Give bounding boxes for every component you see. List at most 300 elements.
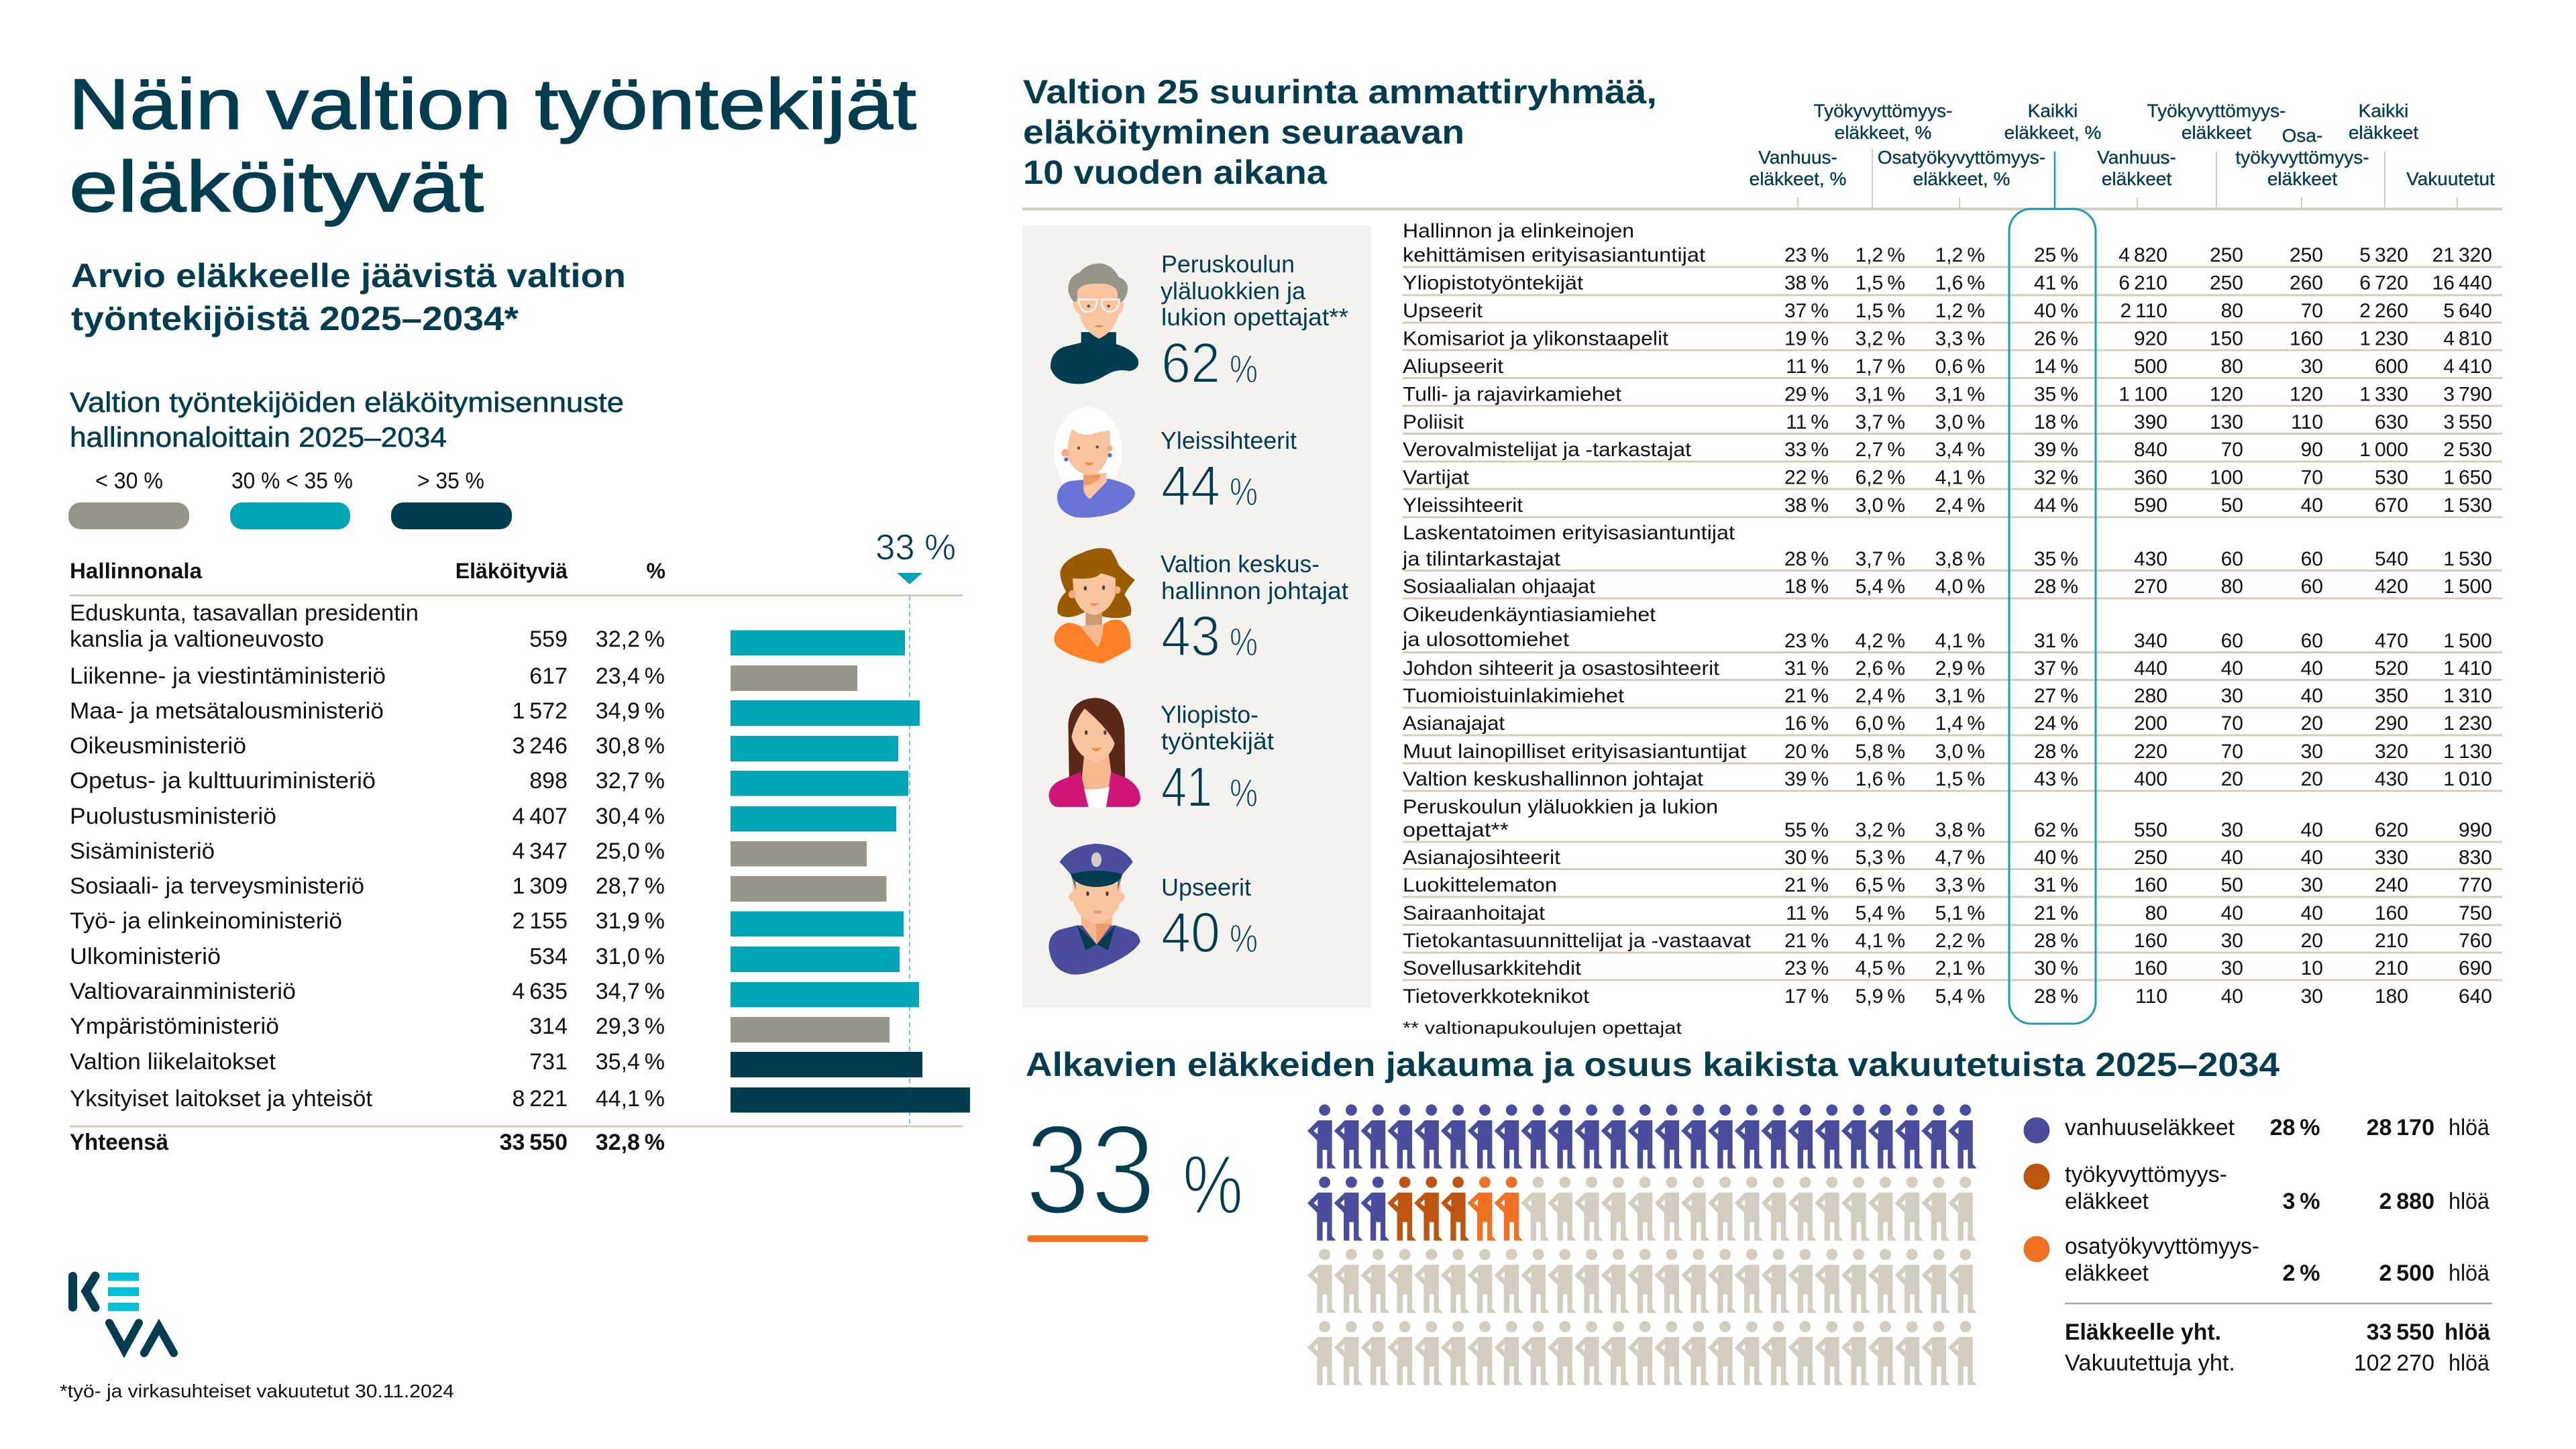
row 20: Asianajosihteerit — [1403, 847, 1561, 869]
row: Työ: Työ- ja elinkeinoministeriö — [70, 908, 342, 934]
text: teachers 62 % — [1161, 250, 1348, 394]
row 9: 4,1 % — [1935, 467, 1985, 488]
text: teachers 62 %: lukion opettajat** — [1161, 303, 1348, 331]
subtitle: työntekijöistä 2025–2034* — [71, 300, 519, 337]
row 6: Tulli- ja rajavirkamiehet — [1403, 384, 1622, 405]
row 16: 1 230 — [2443, 712, 2492, 735]
row 8: 2,7 % — [1856, 439, 1905, 461]
legend: colour classes: < 30 % — [95, 468, 163, 494]
row 19: 3,8 % — [1935, 819, 1985, 841]
average marker 33 % — [875, 527, 956, 584]
row 23: 760 — [2459, 930, 2492, 952]
row 23: 210 — [2375, 930, 2408, 952]
row 16: 200 — [2134, 712, 2167, 735]
row 16 — [1403, 712, 2492, 735]
row 1: 250 — [2210, 244, 2243, 266]
row 7: 3 550 — [2443, 411, 2492, 433]
row 18: 20 — [2221, 768, 2243, 790]
row 5: 600 — [2375, 356, 2408, 378]
row: Liikenne — [70, 663, 857, 691]
row 3 — [1403, 300, 2492, 322]
heading: 25 largest occupational groups: eläköityminen seuraavan — [1023, 113, 1464, 151]
column headers: työkyvyttömyys- — [2235, 147, 2369, 168]
row 24: 210 — [2375, 957, 2408, 979]
subtitle — [71, 257, 626, 337]
row 2: 6 720 — [2359, 272, 2408, 294]
row: Valtion liikelaitokset: 731 — [529, 1049, 568, 1075]
row 10: 50 — [2221, 494, 2243, 517]
row 8 — [1403, 439, 2492, 461]
row 8: 1 000 — [2359, 439, 2408, 461]
icon: central government manager — [1054, 548, 1135, 663]
column headers: eläkkeet, % — [2004, 122, 2101, 143]
row 16: 70 — [2221, 712, 2243, 735]
row 3: 37 % — [1784, 300, 1829, 322]
row: Valtiovarain — [70, 979, 919, 1008]
row 15: 30 — [2221, 685, 2243, 707]
row: Eduskunta: 32,2 % — [596, 627, 665, 652]
row 21: 240 — [2375, 874, 2408, 896]
row 19: 3,2 % — [1856, 819, 1905, 841]
row 21 — [1403, 874, 2492, 896]
row 19: 30 — [2221, 819, 2243, 841]
row 11 — [1402, 522, 2492, 570]
row 4: 920 — [2134, 327, 2167, 350]
row: Yksityiset: Yksityiset laitokset ja yhteisöt — [70, 1086, 373, 1112]
row: Sosiaali: 28,7 % — [596, 873, 665, 899]
row 23: Tietokantasuunnittelijat ja -vastaavat — [1403, 930, 1752, 952]
row: Puolustus: Puolustusministeriö — [70, 804, 276, 829]
disability pensions: hlöä — [2449, 1189, 2489, 1214]
row 24: 30 — [2221, 957, 2243, 979]
row: Opetus: Opetus- ja kulttuuriministeriö — [70, 768, 376, 794]
row 4 — [1403, 327, 2492, 350]
row: Opetus — [70, 768, 908, 796]
row 2: mixed pensions — [1307, 1177, 1977, 1240]
row 5: 14 % — [2034, 356, 2078, 378]
row: Yksityiset — [70, 1086, 970, 1112]
legend: colour classes — [68, 468, 512, 529]
row 21: 770 — [2459, 874, 2492, 896]
column headers: Kaikki — [2359, 101, 2408, 121]
row 2: 250 — [2210, 272, 2243, 294]
row 20 — [1403, 847, 2492, 869]
total retiring: Eläkkeelle yht. — [2065, 1320, 2221, 1345]
partial disability pensions: osatyökyvyttömyys- — [2065, 1234, 2259, 1259]
row 15 — [1403, 685, 2492, 707]
row 8: 90 — [2301, 439, 2323, 461]
row 10: 38 % — [1784, 494, 1829, 517]
row: total — [70, 1130, 665, 1155]
row: Maa: 34,9 % — [596, 698, 665, 724]
row: Maa: 1 572 — [513, 698, 568, 724]
row 18: 430 — [2375, 768, 2408, 790]
row 13: 31 % — [2034, 630, 2078, 652]
row 11: 430 — [2134, 548, 2167, 570]
heading: distribution of starting pensions: Alkavien eläkkeiden jakauma ja osuus kaikista vakuutetuista 2025–2034 — [1026, 1046, 2279, 1083]
row 5: 1,7 % — [1856, 356, 1905, 378]
row 4: 160 — [2290, 327, 2323, 350]
row: Ympäristö: 29,3 % — [596, 1014, 665, 1039]
row 4: 3,2 % — [1856, 327, 1905, 350]
row 22: 40 — [2221, 902, 2243, 924]
row 21: 21 % — [1784, 874, 1829, 896]
heading: 25 largest occupational groups — [1023, 73, 1657, 191]
row 17: 1 130 — [2443, 741, 2492, 763]
row 11: 540 — [2375, 548, 2408, 570]
row 7: 3,7 % — [1856, 411, 1905, 433]
text: teachers 62 %: yläluokkien ja — [1161, 277, 1306, 305]
row 8: 39 % — [2034, 439, 2078, 461]
row 10: 40 — [2301, 494, 2323, 517]
row 22: 5,1 % — [1935, 902, 1985, 924]
row: Opetus: 898 — [529, 768, 568, 794]
row 3: 80 — [2221, 300, 2243, 322]
row 1: 25 % — [2034, 244, 2078, 266]
row 20: 830 — [2459, 847, 2492, 869]
row: Eduskunta — [70, 600, 905, 655]
row 1: 1,2 % — [1935, 244, 1985, 266]
column headers: Vakuutetut — [2406, 168, 2495, 189]
row 2: 260 — [2290, 272, 2323, 294]
row 13: Oikeudenkäyntiasiamiehet — [1403, 604, 1656, 626]
row: Ulko: 534 — [529, 944, 568, 969]
row 18: 400 — [2134, 768, 2167, 790]
text: secretaries 44 %: 44 — [1161, 454, 1220, 517]
row 2: 1,5 % — [1856, 272, 1905, 294]
row 12: 1 500 — [2443, 576, 2492, 598]
row 25: 640 — [2459, 985, 2492, 1008]
text: managers 43 %: 43 — [1161, 604, 1220, 667]
row 22: Sairaanhoitajat — [1403, 902, 1546, 924]
row: Sisä — [70, 839, 867, 867]
row 25 — [1403, 985, 2492, 1008]
old-age pensions: 28 % — [2270, 1115, 2320, 1140]
row 24: Sovellusarkkitehdit — [1403, 957, 1582, 979]
legend: pension types — [2023, 1115, 2492, 1376]
row 23 — [1403, 930, 2492, 952]
disability pensions: työkyvyttömyys- — [2065, 1162, 2227, 1187]
row 12: 28 % — [2034, 576, 2078, 598]
row 8: 840 — [2134, 439, 2167, 461]
subtitle: Arvio eläkkeelle jäävistä valtion — [71, 257, 626, 294]
row 25: 5,4 % — [1935, 985, 1985, 1008]
row: Liikenne: Liikenne- ja viestintäministeriö — [70, 663, 386, 689]
row 13: 4,1 % — [1935, 630, 1985, 652]
partial disability pensions: hlöä — [2449, 1260, 2489, 1286]
row: Sisä: Sisäministeriö — [70, 839, 215, 864]
row 16: 6,0 % — [1856, 712, 1905, 735]
row 1 — [1403, 220, 2492, 266]
row 13: 60 — [2301, 630, 2323, 652]
row: Työ: 2 155 — [513, 908, 568, 934]
row 2: 41 % — [2034, 272, 2078, 294]
row 1: 1,2 % — [1856, 244, 1905, 266]
column headers: eläkkeet, % — [1750, 168, 1846, 189]
row 20: 30 % — [1784, 847, 1829, 869]
title: Näin valtion työntekijät — [68, 64, 916, 144]
row 14: 440 — [2134, 657, 2167, 680]
disability pensions: eläkkeet — [2065, 1189, 2149, 1214]
column headers: Työkyvyttömyys- — [2147, 101, 2286, 121]
row 10: 2,4 % — [1935, 494, 1985, 517]
partial disability pensions: 2 500 — [2379, 1260, 2434, 1286]
row 10: 670 — [2375, 494, 2408, 517]
table header: % — [647, 559, 665, 583]
row 16: 24 % — [2034, 712, 2078, 735]
old-age pensions: 28 170 — [2367, 1115, 2434, 1140]
row 25: 30 — [2301, 985, 2323, 1008]
row 11: 28 % — [1784, 548, 1829, 570]
row: Ympäristö — [70, 1014, 890, 1042]
table: occupational groups — [1022, 101, 2502, 1038]
row 10: 590 — [2134, 494, 2167, 517]
row 13: ja ulosottomiehet — [1402, 629, 1570, 651]
icon: officer — [1049, 844, 1140, 975]
average marker 33 %: 33 % — [875, 527, 956, 568]
row 8: 33 % — [1784, 439, 1829, 461]
row: Puolustus: 30,4 % — [596, 804, 665, 829]
row: Valtion liikelaitokset: Valtion liikelaitokset — [70, 1049, 276, 1075]
row 11: Laskentatoimen erityisasiantuntijat — [1403, 522, 1735, 544]
row 18: Valtion keskushallinnon johtajat — [1403, 768, 1704, 790]
row 25: 110 — [2135, 985, 2167, 1008]
row 19: 62 % — [2034, 819, 2078, 841]
row 7: 390 — [2134, 411, 2167, 433]
row 17: 3,0 % — [1935, 741, 1985, 763]
row: Yksityiset: 44,1 % — [596, 1086, 665, 1112]
text: officers 40 %: 40 — [1161, 901, 1220, 964]
row 24: 30 % — [2034, 957, 2078, 979]
row 6 — [1403, 384, 2492, 405]
row 4: 19 % — [1784, 327, 1829, 350]
disability pensions: 2 880 — [2379, 1189, 2434, 1214]
row 19: 990 — [2459, 819, 2492, 841]
row 14: 31 % — [1784, 657, 1829, 680]
text: managers 43 % — [1161, 550, 1348, 667]
total insured — [2065, 1350, 2489, 1376]
row: total: 32,8 % — [596, 1130, 665, 1155]
row 6: 1 100 — [2118, 384, 2167, 405]
row 22: 40 — [2301, 902, 2323, 924]
row 1: 250 — [2290, 244, 2323, 266]
row 21: 160 — [2134, 874, 2167, 896]
text: officers 40 %: % — [1230, 917, 1258, 961]
row: total: 33 550 — [500, 1130, 568, 1155]
row 20: 5,3 % — [1856, 847, 1905, 869]
row 6: 3 790 — [2443, 384, 2492, 405]
total retiring — [2065, 1320, 2490, 1345]
column headers: Vanhuus- — [2097, 147, 2176, 168]
row 14: 2,6 % — [1856, 657, 1905, 680]
row 13 — [1402, 604, 2492, 652]
row 4: 26 % — [2034, 327, 2078, 350]
row 12: 18 % — [1784, 576, 1829, 598]
row 4: 3,3 % — [1935, 327, 1985, 350]
row: Yksityiset: 8 221 — [513, 1086, 568, 1112]
row 21: Luokittelematon — [1403, 874, 1557, 896]
total insured: hlöä — [2449, 1350, 2489, 1376]
row 10 — [1403, 494, 2492, 517]
row 1: 21 320 — [2432, 244, 2492, 266]
text: university employees 41 %: Yliopisto- — [1161, 700, 1258, 729]
row 3: 70 — [2301, 300, 2323, 322]
row 8: 70 — [2221, 439, 2243, 461]
row 3: 5 640 — [2443, 300, 2492, 322]
row 20: 4,7 % — [1935, 847, 1985, 869]
row 2: Yliopistotyöntekijät — [1403, 272, 1584, 294]
row 25: 5,9 % — [1856, 985, 1905, 1008]
row 18: 1,5 % — [1935, 768, 1985, 790]
row 6: 3,1 % — [1935, 384, 1985, 405]
row: Oikeus: Oikeusministeriö — [70, 733, 246, 759]
row 13: 23 % — [1784, 630, 1829, 652]
row 18: 39 % — [1784, 768, 1829, 790]
row 2: 16 440 — [2432, 272, 2492, 294]
row 19: opettajat** — [1403, 819, 1509, 841]
row 9: 1 650 — [2443, 467, 2492, 488]
row: Opetus: 32,7 % — [596, 768, 665, 794]
row 24: 4,5 % — [1856, 957, 1905, 979]
row 15: 40 — [2301, 685, 2323, 707]
row: Eduskunta: 559 — [529, 627, 568, 652]
partial disability pensions: eläkkeet — [2065, 1260, 2149, 1286]
row 15: Tuomioistuinlakimiehet — [1403, 685, 1625, 707]
total insured: 102 270 — [2354, 1350, 2434, 1376]
row 7: 11 % — [1786, 411, 1829, 433]
row 9: 100 — [2210, 467, 2243, 488]
row 23: 4,1 % — [1856, 930, 1905, 952]
row 13: 470 — [2375, 630, 2408, 652]
row 7: 18 % — [2034, 411, 2078, 433]
row: Valtiovarain: 4 635 — [513, 979, 568, 1004]
row 9: 70 — [2301, 467, 2323, 488]
column headers: eläkkeet — [2102, 168, 2171, 189]
row 15: 3,1 % — [1935, 685, 1985, 707]
row 3: others — [1307, 1249, 1977, 1313]
old-age pensions: vanhuuseläkkeet — [2065, 1115, 2235, 1140]
text: officers 40 % — [1161, 873, 1258, 964]
row 17: 30 — [2301, 741, 2323, 763]
highlight box: all pensions column — [2009, 209, 2096, 1024]
row 24: 10 — [2301, 957, 2323, 979]
row 15: 1 310 — [2443, 685, 2492, 707]
row 17: 28 % — [2034, 741, 2078, 763]
partial disability pensions — [2023, 1234, 2489, 1286]
row 9 — [1403, 467, 2492, 488]
row 25: 40 — [2221, 985, 2243, 1008]
row 2: 38 % — [1784, 272, 1829, 294]
row 17: 220 — [2134, 741, 2167, 763]
row 23: 160 — [2134, 930, 2167, 952]
row 19: 40 — [2301, 819, 2323, 841]
row 13: 4,2 % — [1856, 630, 1905, 652]
row 9: 32 % — [2034, 467, 2078, 488]
row 23: 20 — [2301, 930, 2323, 952]
text: secretaries 44 %: Yleissihteerit — [1161, 427, 1297, 454]
row 20: 40 — [2221, 847, 2243, 869]
row: Eduskunta: Eduskunta, tasavallan presidentin — [70, 600, 419, 626]
logo: Keva — [68, 1272, 174, 1353]
row 14: 1 410 — [2443, 657, 2492, 680]
table: administrative branches — [70, 559, 970, 1155]
row 25: 28 % — [2034, 985, 2078, 1008]
column headers: eläkkeet — [2182, 122, 2251, 143]
table footnote: ** valtionapukoulujen opettajat — [1403, 1018, 1682, 1038]
row 5: 500 — [2134, 356, 2167, 378]
text: managers 43 %: hallinnon johtajat — [1161, 577, 1348, 604]
row 25: Tietoverkkoteknikot — [1403, 985, 1590, 1008]
row 18 — [1403, 768, 2492, 790]
row 1: old-age pensions — [1307, 1104, 1977, 1169]
row 11: 1 530 — [2443, 548, 2492, 570]
row 14: 37 % — [2034, 657, 2078, 680]
row: Sosiaali — [70, 873, 887, 902]
row 4: 1 230 — [2359, 327, 2408, 350]
row 16: 16 % — [1784, 712, 1829, 735]
text: university employees 41 %: % — [1230, 771, 1258, 815]
text: university employees 41 % — [1161, 700, 1274, 818]
row 23: 21 % — [1784, 930, 1829, 952]
row 25: 180 — [2375, 985, 2408, 1008]
row 9: 22 % — [1784, 467, 1829, 488]
row 7 — [1403, 411, 2492, 433]
total retiring: 33 550 — [2367, 1320, 2434, 1345]
row 1: 4 820 — [2118, 244, 2167, 266]
row 21: 50 — [2221, 874, 2243, 896]
disability pensions — [2023, 1162, 2489, 1214]
row 14: Johdon sihteerit ja osastosihteerit — [1403, 657, 1720, 680]
row 16: 1,4 % — [1935, 712, 1985, 735]
row 12: Sosiaalialan ohjaajat — [1403, 576, 1596, 598]
row: Sosiaali: 1 309 — [513, 873, 568, 899]
text: officers 40 %: Upseerit — [1161, 873, 1251, 901]
partial disability pensions: 2 % — [2283, 1260, 2320, 1286]
text: teachers 62 %: % — [1230, 347, 1258, 391]
text: teachers 62 %: 62 — [1161, 331, 1220, 394]
text: managers 43 %: Valtion keskus- — [1161, 550, 1320, 578]
row 20: 330 — [2375, 847, 2408, 869]
row 23: 30 — [2221, 930, 2243, 952]
footnote: *työ- ja virkasuhteiset vakuutetut 30.11.2024 — [60, 1381, 454, 1401]
heading: 25 largest occupational groups: Valtion 25 suurinta ammattiryhmää, — [1023, 73, 1657, 111]
column headers: eläkkeet, % — [1835, 122, 1931, 143]
row 2: 6 210 — [2118, 272, 2167, 294]
row 24: 160 — [2134, 957, 2167, 979]
row 6: 35 % — [2034, 384, 2078, 405]
row: Valtion liikelaitokset: 35,4 % — [596, 1049, 665, 1075]
row 12: 5,4 % — [1856, 576, 1905, 598]
row 14: 40 — [2221, 657, 2243, 680]
text: secretaries 44 %: % — [1230, 470, 1258, 514]
row 17: 320 — [2375, 741, 2408, 763]
row 19: Peruskoulun yläluokkien ja lukion — [1403, 796, 1718, 818]
icon: university employee — [1049, 698, 1140, 808]
row 14: 520 — [2375, 657, 2408, 680]
row 7: 110 — [2291, 411, 2323, 433]
row: Sisä: 4 347 — [513, 839, 568, 864]
row 11: ja tilintarkastajat — [1402, 548, 1561, 570]
row 7: 3,0 % — [1935, 411, 1985, 433]
row 8: Verovalmistelijat ja -tarkastajat — [1403, 439, 1692, 461]
total retiring: hlöä — [2445, 1320, 2490, 1345]
row 24 — [1403, 957, 2492, 979]
row 21: 3,3 % — [1935, 874, 1985, 896]
row 23: 2,2 % — [1935, 930, 1985, 952]
row 18: 1 010 — [2443, 768, 2492, 790]
row: Oikeus — [70, 733, 898, 761]
row 16: 20 — [2301, 712, 2323, 735]
